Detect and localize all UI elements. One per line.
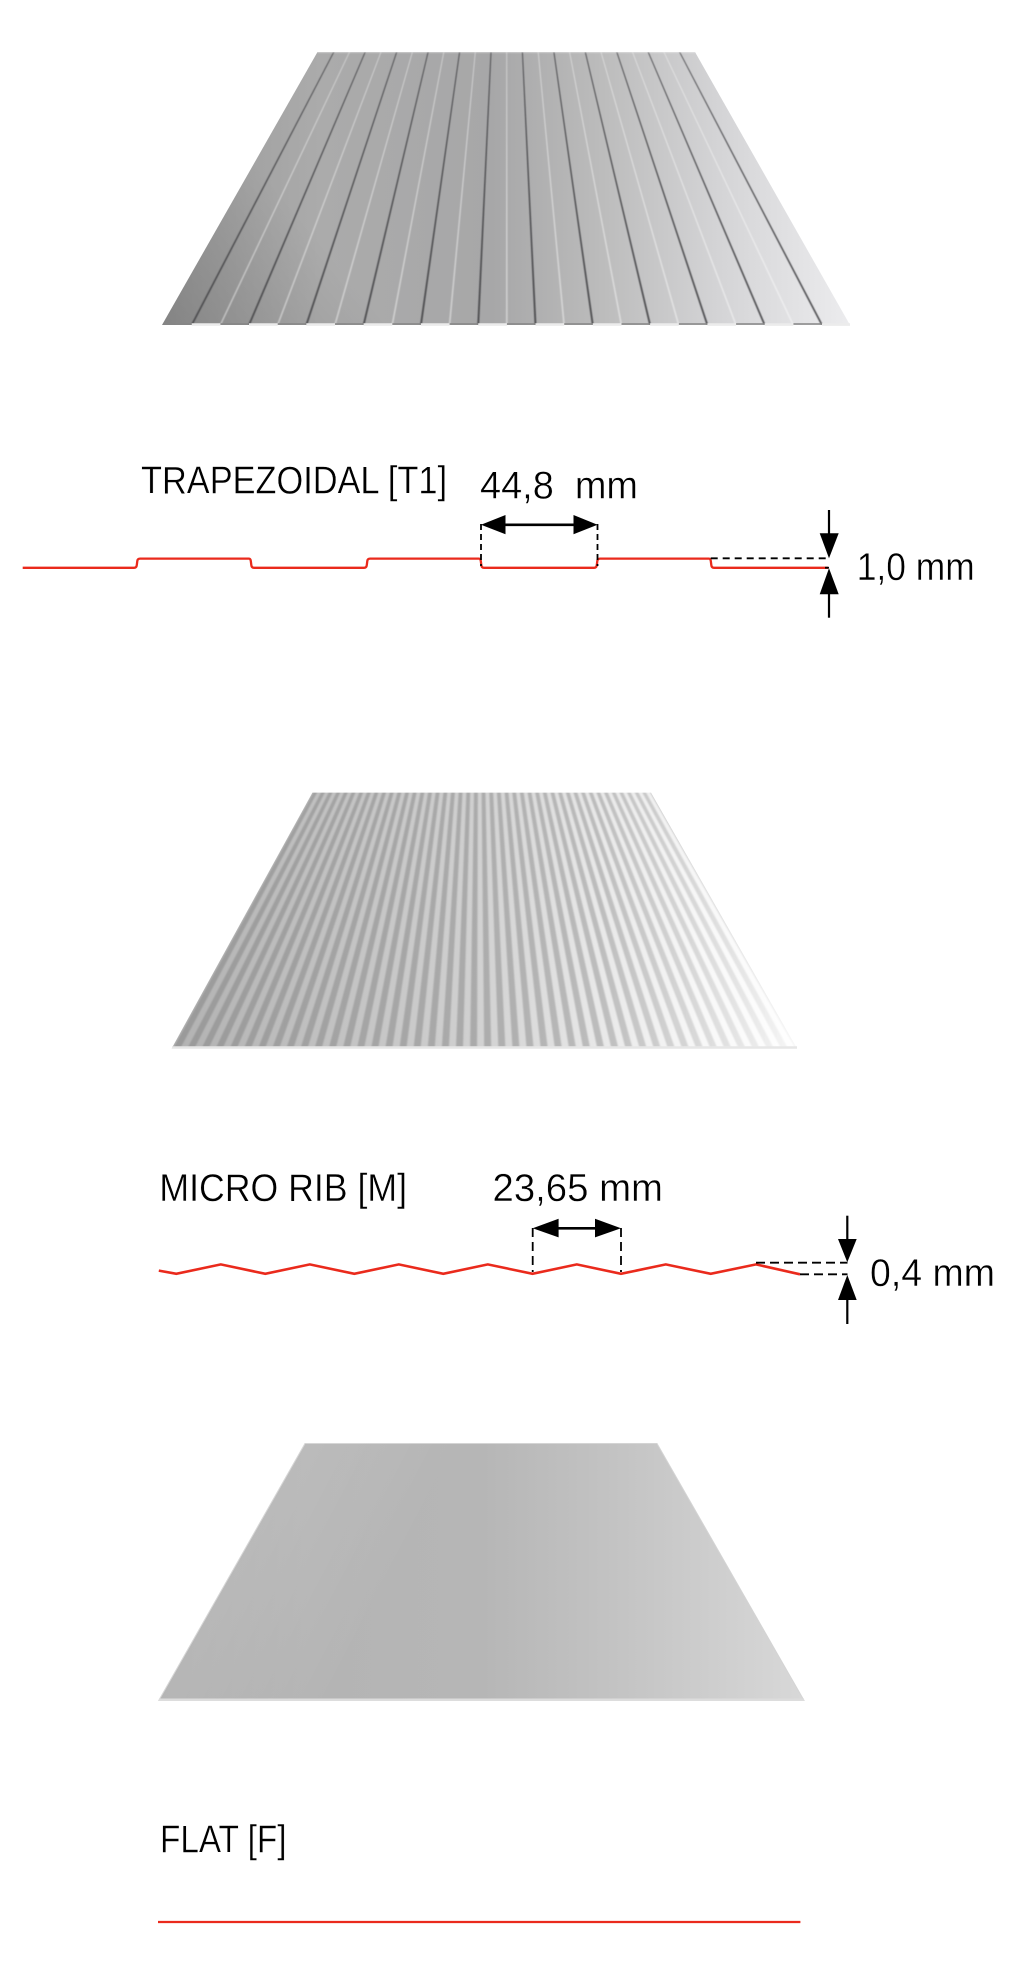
- dimension label: 44,8 mm: 44,8 mm: [480, 464, 638, 508]
- arrow: 1,0 mm height dimension: [711, 510, 839, 618]
- dimension label: 1,0 mm: 1,0 mm: [857, 546, 975, 589]
- dimension label: 23,65 mm: 23,65 mm: [492, 1167, 663, 1210]
- heading: trapezoidal: TRAPEZOIDAL [T1]: [141, 460, 447, 502]
- heading: flat: FLAT [F]: [160, 1819, 286, 1862]
- arrow: 44,8 mm width dimension: [481, 515, 598, 566]
- profile line: flat: [158, 1921, 800, 1923]
- heading: micro rib: MICRO RIB [M]: [159, 1167, 407, 1210]
- profile line: trapezoidal: [23, 559, 828, 568]
- panel: micro rib sheet: [172, 792, 801, 1048]
- arrow: 0,4 mm height dimension: [756, 1216, 857, 1324]
- panel: flat sheet: [159, 1444, 804, 1700]
- arrow: 23,65 mm width dimension: [533, 1219, 621, 1272]
- dimension label: 0,4 mm: 0,4 mm: [870, 1252, 995, 1295]
- profile line: micro rib: [159, 1264, 800, 1274]
- panel: trapezoidal sheet: [162, 52, 850, 325]
